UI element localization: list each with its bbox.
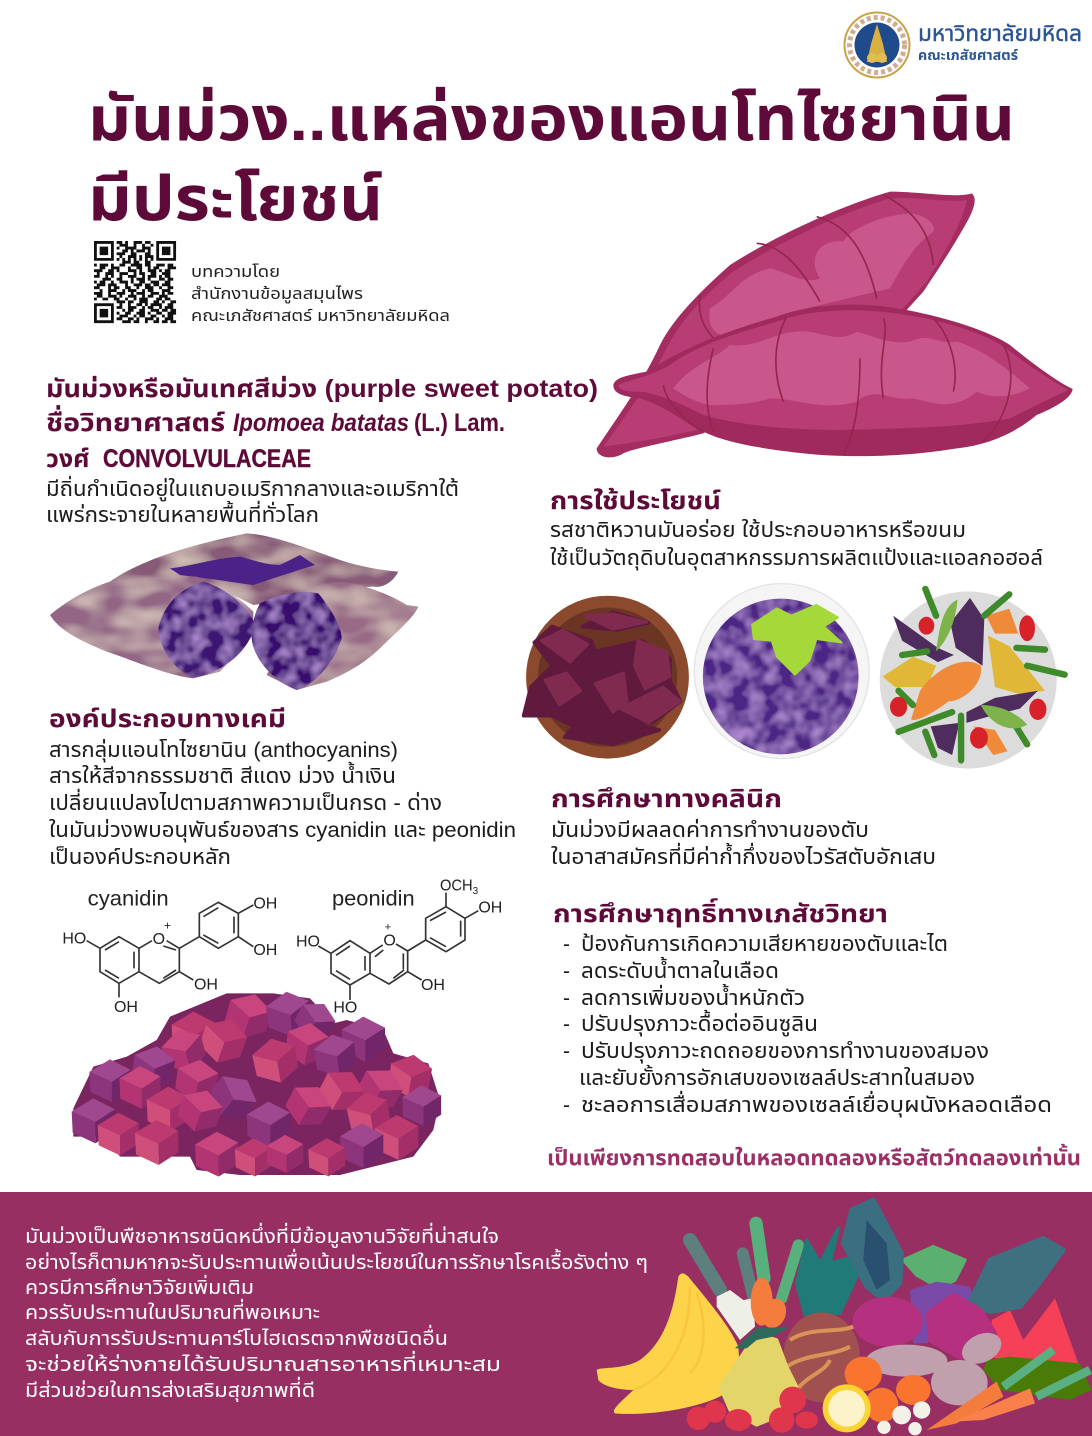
footer text: มีส่วนช่วยในการส่งเสริมสุขภาพที่ดี	[25, 1376, 315, 1402]
note: in vitro or animal only: เป็นเพียงการทดสอบในหลอดทดลองหรือสัตว์ทดลองเท่านั้น	[547, 1144, 1081, 1170]
article credit: สำนักงานข้อมูลสมุนไพร	[191, 286, 363, 303]
dish: purple sweet potato chips in wooden bowl	[524, 596, 689, 759]
structure: cyanidin	[62, 887, 277, 1016]
garlic	[877, 1401, 930, 1435]
list: pharmacological effects: ลดระดับน้ำตาลในเลือด	[581, 956, 779, 983]
structure: cyanidin: HO	[62, 930, 86, 947]
text: chemical constituents: เป็นองค์ประกอบหลัก	[49, 846, 231, 869]
list: pharmacological effects: -	[563, 1040, 570, 1063]
text: chemical constituents: ในมันม่วงพบอนุพันธ์ของสาร cyanidin และ peonidin	[49, 818, 516, 843]
list: pharmacological effects: ลดการเพิ่มของน้ำหนักตัว	[581, 983, 805, 1010]
purple vegetable	[910, 1282, 973, 1343]
watermelon	[983, 1298, 1092, 1400]
lemon	[823, 1384, 871, 1432]
list: pharmacological effects: ปรับปรุงภาวะดื้อต่ออินซูลิน	[581, 1009, 818, 1037]
list: pharmacological effects: และยับยั้งการอักเสบของเซลล์ประสาทในสมอง	[579, 1064, 975, 1090]
text: uses	[550, 518, 1043, 571]
heading: clinical studies: การศึกษาทางคลินิก	[551, 785, 782, 813]
list: pharmacological effects: ป้องกันการเกิดความเสียหายของตับและไต	[581, 933, 948, 956]
front potato	[613, 305, 1073, 456]
structure: cyanidin: OH	[253, 942, 277, 959]
footer text: อย่างไรก็ตามหากจะรับประทานเพื่อเน้นประโยชน์ในการรักษาโรคเรื้อรังต่าง ๆ	[25, 1248, 648, 1274]
structure: peonidin: OH	[421, 977, 445, 994]
structure: peonidin: HO	[333, 999, 357, 1016]
beet leaves	[843, 1200, 1063, 1312]
title: มีประโยชน์	[88, 165, 383, 234]
list: pharmacological effects: -	[563, 1094, 570, 1117]
heading: pharmacological studies: การศึกษาฤทธิ์ทางเภสัชวิทยา	[553, 897, 888, 928]
text: chemical constituents: เปลี่ยนแปลงไปตามสภาพความเป็นกรด - ด่าง	[49, 788, 442, 815]
oranges	[845, 1357, 931, 1422]
structure: cyanidin: OH	[253, 896, 277, 913]
structure: peonidin: O	[383, 932, 396, 949]
photo: cut purple sweet potato	[50, 533, 418, 690]
structure: cyanidin: +	[164, 918, 171, 932]
white radish	[717, 1290, 755, 1340]
back potato with slit	[110, 533, 398, 605]
text: origin	[46, 475, 459, 527]
structure: peonidin: OH	[478, 900, 502, 917]
heading: name of plant: Ipomoea batatas	[233, 409, 409, 437]
heading: name of plant: วงศ์	[46, 445, 90, 473]
text: origin: แพร่กระจายในหลายพื้นที่ทั่วโลก	[46, 500, 319, 527]
text: clinical studies: ในอาสาสมัครที่มีค่าก้ำกึ่งของไวรัสตับอักเสบ	[551, 842, 936, 869]
heading: chemical constituents: องค์ประกอบทางเคมี	[49, 705, 286, 733]
back potato	[597, 192, 975, 457]
heading: uses: การใช้ประโยชน์	[550, 487, 721, 515]
green leaf	[903, 1247, 965, 1288]
potatoes	[866, 1327, 1006, 1405]
footer text: มันม่วงเป็นพืชอาหารชนิดหนึ่งที่มีข้อมูลงานวิจัยที่น่าสนใจ	[25, 1222, 499, 1249]
heading: name of plant: มันม่วงหรือมันเทศสีม่วง (purple sweet potato)	[46, 375, 598, 403]
structure: peonidin: 3	[473, 886, 479, 897]
pear	[720, 1327, 797, 1425]
carrots	[751, 1278, 790, 1331]
photos: food dishes	[524, 584, 1065, 769]
radish and carrot greens	[690, 1223, 798, 1298]
list: pharmacological effects: ชะลอการเสื่อมสภาพของเซลล์เยื่อบุผนังหลอดเลือด	[581, 1090, 1052, 1118]
text: clinical studies: มันม่วงมีผลลดค่าการทำงานของตับ	[551, 818, 869, 842]
list: pharmacological effects: -	[563, 987, 570, 1010]
text: chemical constituents: สารกลุ่มแอนโทไซยานิน (anthocyanins)	[49, 738, 398, 763]
title: มันม่วง..แหล่งของแอนโทไซยานิน	[88, 85, 1015, 154]
article credit: คณะเภสัชศาสตร์ มหาวิทยาลัยมหิดล	[191, 308, 450, 325]
list: pharmacological effects: -	[563, 960, 570, 983]
footer text: จะช่วยให้ร่างกายได้รับปริมาณสารอาหารที่เหมาะสม	[25, 1350, 501, 1376]
article credit	[191, 264, 450, 325]
structure: peonidin: peonidin	[332, 887, 415, 911]
structure: peonidin: OCH	[440, 878, 473, 895]
footer text	[25, 1222, 648, 1402]
structure: peonidin	[296, 878, 502, 1016]
heading: name of plant	[46, 375, 598, 473]
logo seal	[844, 12, 910, 78]
structure: cyanidin: O	[153, 931, 165, 948]
panel: footer summary	[0, 1192, 1092, 1436]
footer text: สลับกับการรับประทานคาร์โบไฮเดรตจากพืชชนิดอื่น	[25, 1324, 448, 1350]
logo university name: มหาวิทยาลัยมหิดล	[918, 21, 1082, 46]
strawberries	[687, 1387, 818, 1433]
illustration: fruits and vegetables	[597, 1200, 1092, 1435]
photo: pile of diced purple sweet potato	[72, 988, 441, 1177]
left half	[50, 576, 255, 678]
footer text: ควรมีการศึกษาวิจัยเพิ่มเติม	[25, 1274, 254, 1299]
article credit: บทความโดย	[191, 264, 280, 281]
chemical structures	[62, 878, 502, 1016]
structure: peonidin: +	[385, 922, 392, 934]
right half	[252, 582, 418, 690]
illustration: two purple sweet potatoes	[597, 192, 1073, 457]
dish: mashed purple sweet potato in white bowl	[694, 584, 869, 759]
beets	[853, 1295, 995, 1358]
bananas	[597, 1273, 740, 1414]
dish: salad plate	[880, 589, 1065, 769]
structure: cyanidin: OH	[194, 976, 218, 993]
heading: name of plant: ชื่อวิทยาศาสตร์	[46, 405, 225, 437]
text: chemical constituents: สารให้สีจากธรรมชาติ สีแดง ม่วง น้ำเงิน	[49, 761, 396, 788]
bottom carrots	[927, 1350, 1090, 1430]
logo faculty name: คณะเภสัชศาสตร์	[918, 47, 1018, 63]
footer text: ควรรับประทานในปริมาณที่พอเหมาะ	[25, 1298, 320, 1324]
text: clinical studies	[551, 818, 936, 869]
list: pharmacological effects: -	[563, 1013, 570, 1036]
logo: Mahidol University	[844, 12, 1082, 78]
heading: name of plant: CONVOLVULACEAE	[103, 445, 311, 473]
cabbage	[783, 1312, 860, 1402]
QR code	[94, 241, 176, 323]
list: pharmacological effects	[563, 933, 1052, 1118]
heading: name of plant: (L.) Lam.	[414, 409, 505, 437]
structure: cyanidin: cyanidin	[88, 887, 169, 911]
title	[88, 85, 1015, 234]
text: origin: มีถิ่นกำเนิดอยู่ในแถบอเมริกากลางและอเมริกาใต้	[46, 475, 459, 502]
structure: cyanidin: OH	[114, 999, 138, 1016]
text: uses: รสชาติหวานมันอร่อย ใช้ประกอบอาหารหรือขนม	[550, 518, 966, 542]
text: uses: ใช้เป็นวัตถุดิบในอุตสาหกรรมการผลิตแป้งและแอลกอฮอล์	[550, 546, 1043, 571]
text: chemical constituents	[49, 738, 516, 869]
list: pharmacological effects: -	[563, 933, 570, 956]
list: pharmacological effects: ปรับปรุงภาวะถดถอยของการทำงานของสมอง	[581, 1040, 989, 1064]
teal leaves	[797, 1228, 857, 1315]
structure: peonidin: HO	[296, 934, 320, 951]
